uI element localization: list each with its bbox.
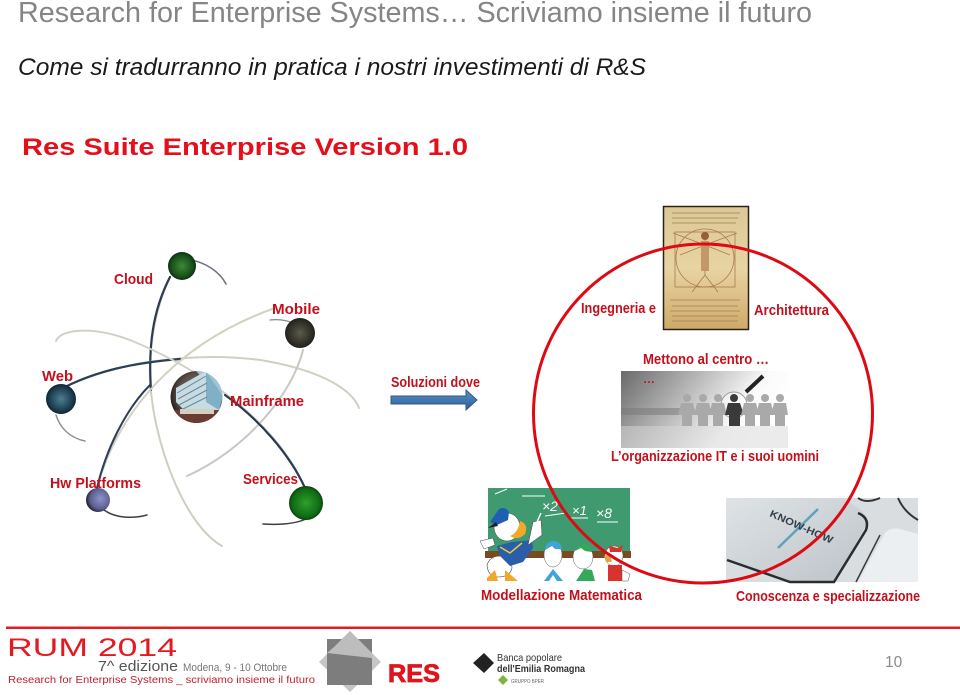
duckling: red <box>604 545 630 581</box>
Donald Duck <box>480 508 542 581</box>
logo: RUM 2014: Modena, 9 - 10 Ottobre <box>183 662 287 674</box>
logo: Banca popolare dell'Emilia Romagna: GRUPPO BPER <box>511 679 544 685</box>
product name: Res Suite Enterprise Version 1.0 <box>22 134 468 161</box>
logo: RUM 2014 <box>7 634 315 686</box>
sphere: mobile <box>285 318 315 348</box>
image: people with magnifier: … <box>643 372 655 386</box>
image: Donald Duck at chalkboard: ×8 <box>596 505 612 521</box>
arrow <box>391 390 477 410</box>
red circle <box>534 244 872 583</box>
logo: Banca popolare dell'Emilia Romagna <box>473 652 585 685</box>
label: Ingegneria e: Ingegneria e <box>581 300 656 317</box>
label: Architettura: Architettura <box>754 302 830 319</box>
label: Mettono al centro: Mettono al centro … <box>643 351 769 368</box>
page number: 10 <box>885 654 903 671</box>
duckling: blue <box>544 541 563 581</box>
subtitle: Come si tradurranno in pratica i nostri investimenti di R&S <box>18 54 646 81</box>
image: Vitruvian man <box>664 206 748 330</box>
diagram: orbiting technologies <box>46 252 359 546</box>
sphere: hw platforms <box>86 488 110 512</box>
sphere: mainframe <box>170 371 223 424</box>
label: Services: Services <box>243 471 298 488</box>
image: know-how keyboard key: KNOW-HOW <box>768 509 835 547</box>
sphere: services <box>289 486 323 520</box>
label: Mainframe: Mainframe <box>230 393 304 410</box>
label: Web: Web <box>42 368 73 385</box>
logo: Banca popolare dell'Emilia Romagna: dell'Emilia Romagna <box>497 663 585 675</box>
image: Donald Duck at chalkboard: ×2 <box>542 498 558 514</box>
label: Soluzioni dove: Soluzioni dove <box>391 374 480 391</box>
image: Donald Duck at chalkboard <box>480 488 631 581</box>
sphere: web <box>46 384 76 414</box>
label: Modellazione Matematica: Modellazione Matematica <box>481 587 643 604</box>
image: people with magnifier <box>621 371 788 448</box>
label: Hw Platforms: Hw Platforms <box>50 475 141 492</box>
logo: RUM 2014: RUM 2014 <box>7 634 177 662</box>
image: know-how keyboard key <box>726 498 918 582</box>
logo: RES <box>319 631 440 692</box>
logo: RUM 2014: Research for Enterprise Systems _ scriviamo insieme il futuro <box>8 675 315 686</box>
duckling: green <box>573 544 595 581</box>
image: Donald Duck at chalkboard: ×1 <box>572 503 587 518</box>
label: Cloud: Cloud <box>114 271 153 288</box>
sphere: cloud <box>168 252 196 280</box>
logo: Banca popolare dell'Emilia Romagna: Banca popolare <box>497 652 562 664</box>
footer <box>6 626 960 692</box>
logo: RES: RES <box>388 660 440 688</box>
label: Mobile: Mobile <box>272 301 320 318</box>
label: organizzazione IT: L’organizzazione IT e i suoi uomini <box>611 448 819 465</box>
logo: RUM 2014: 7^ edizione <box>98 658 178 675</box>
label: Conoscenza e specializzazione: Conoscenza e specializzazione <box>736 588 920 605</box>
